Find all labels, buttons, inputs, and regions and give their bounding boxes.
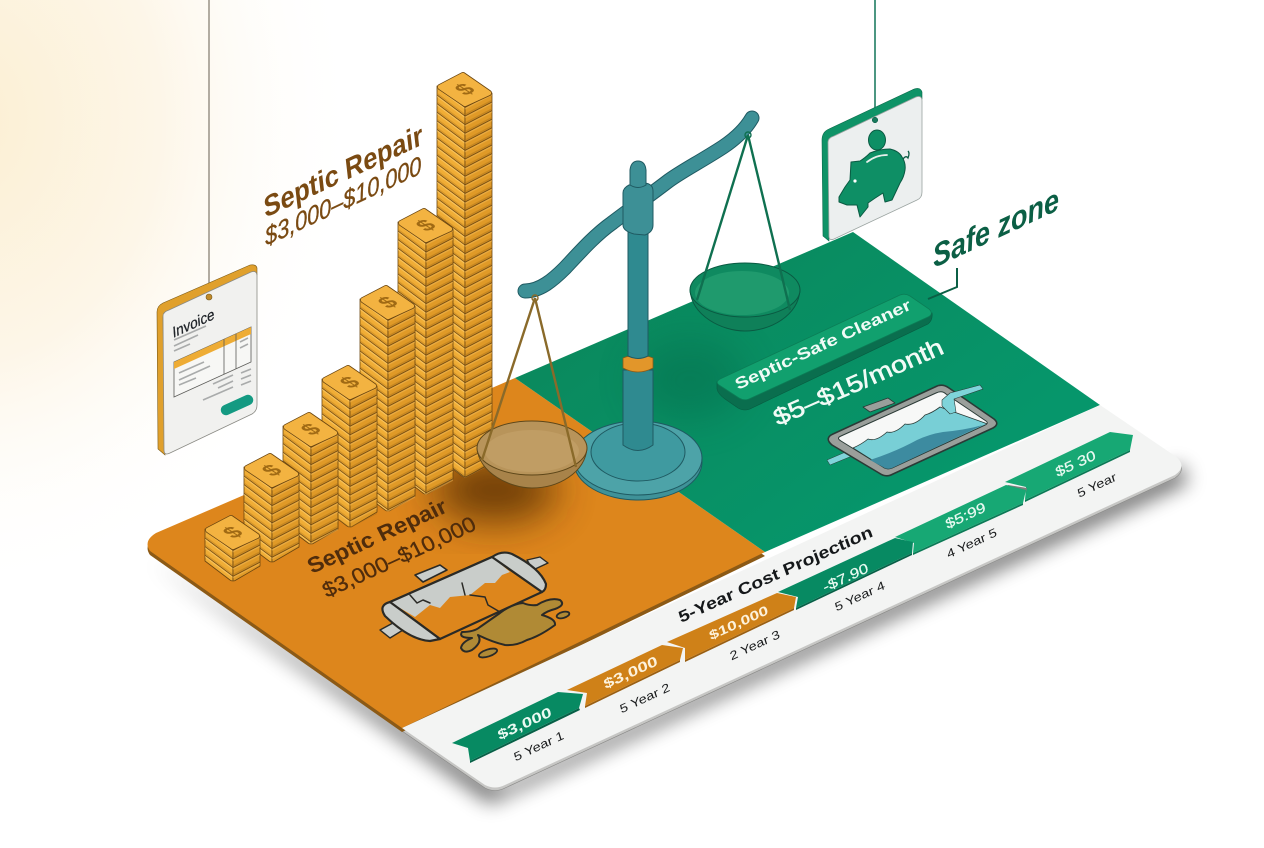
coin stack 1: $ — [217, 522, 249, 542]
ribbon 3 — [667, 593, 796, 662]
coin stack 2 — [244, 456, 299, 563]
badge side — [717, 313, 932, 410]
coin stack 4 — [322, 368, 377, 528]
ribbon 2 — [567, 645, 683, 708]
timeline heading: 5-Year Cost Projection — [676, 523, 875, 626]
year labels — [512, 470, 1118, 764]
ribbon 4 — [778, 538, 913, 610]
isometric base slab — [148, 232, 1181, 790]
cost projection timeline — [452, 432, 1133, 764]
piggy card edge — [822, 88, 922, 241]
slab orange edge — [148, 382, 765, 732]
scale shadow on orange — [433, 458, 557, 522]
tank deep water — [870, 425, 983, 469]
year labels: 5 Year 1 — [512, 728, 565, 764]
invoice table — [174, 327, 251, 397]
septic-safe cleaner badge — [717, 294, 932, 410]
coin stacks bar chart — [205, 75, 492, 582]
piggy bank card — [822, 88, 922, 241]
icon: broken tank — [380, 553, 570, 659]
invoice button — [226, 400, 248, 410]
label: septic repair on orange: $3,000–$10,000 — [318, 512, 480, 602]
piggy card face — [828, 96, 922, 240]
coin stack 3: $ — [295, 419, 327, 439]
year labels: 5 Year 2 — [618, 680, 671, 716]
heading: septic repair wall label: Septic Repair — [262, 117, 424, 224]
coin stack 7 — [437, 75, 492, 478]
piggy card hole — [872, 117, 878, 123]
invoice totals — [203, 369, 251, 400]
invoice card — [157, 265, 257, 455]
scale left pan — [477, 295, 587, 488]
tank crack — [410, 583, 500, 612]
coin stack 7: $ — [449, 79, 481, 99]
scale post upper — [628, 215, 648, 358]
leak puddle — [461, 599, 562, 652]
ribbon 5: $5:99 — [944, 500, 988, 532]
slab shadow — [150, 465, 1188, 803]
badge text: Septic-Safe Cleaner — [732, 295, 914, 393]
year labels: 5 Year — [1076, 470, 1118, 500]
ribbon 6 — [1005, 432, 1133, 502]
coin stack 6: $ — [410, 215, 442, 235]
year labels: 2 Year 3 — [728, 627, 781, 663]
scale shadow on green — [652, 344, 736, 418]
label: septic repair on orange: Septic Repair — [303, 493, 451, 578]
icon: clean septic tank — [827, 385, 997, 476]
tank left cap — [382, 602, 440, 641]
invoice title: Invoice — [172, 306, 215, 342]
ribbon 1 — [452, 692, 583, 763]
year labels: 5 Year 4 — [833, 578, 887, 614]
tank outer frame — [828, 385, 997, 476]
heading: septic repair wall label: $3,000–$10,000 — [263, 152, 423, 253]
price per month: $5–$15/month — [769, 333, 948, 431]
coin stack 3 — [283, 415, 338, 545]
scale — [477, 118, 800, 500]
scale orange collar — [623, 355, 653, 372]
coin stack 5: $ — [372, 292, 404, 312]
ribbon 3: $10,000 — [708, 603, 770, 644]
badge top — [717, 294, 931, 400]
tank body — [390, 557, 542, 639]
invoice hole — [206, 294, 212, 300]
tank intact shell — [390, 557, 510, 617]
scale right pan — [690, 132, 800, 331]
invoice text lines — [174, 326, 206, 351]
tank right cap — [492, 553, 546, 592]
tank pipes — [380, 557, 548, 638]
ribbon 6: $5 30 — [1054, 448, 1098, 480]
hanging line: piggy card — [874, 0, 876, 118]
tank interior — [838, 392, 987, 469]
panel: safe zone green — [515, 232, 1100, 552]
hanging line: invoice — [208, 0, 210, 295]
year labels: 4 Year 5 — [945, 525, 998, 561]
tank inlet pipe — [942, 385, 983, 414]
leak drops — [478, 610, 570, 659]
icon: falling coin — [868, 130, 886, 150]
tank outline top — [390, 557, 492, 602]
ribbon 2: $3,000 — [602, 653, 660, 692]
icon: piggy bank — [839, 149, 909, 217]
scale finial — [630, 161, 646, 188]
ribbon 5 — [895, 485, 1027, 555]
scale post lower — [623, 370, 653, 450]
tank water — [853, 407, 986, 469]
coin stack 4: $ — [334, 372, 366, 392]
scale base disc — [574, 421, 702, 500]
scale hub — [623, 183, 653, 235]
ribbon 1: $3,000 — [496, 704, 554, 743]
scale beam — [525, 118, 752, 291]
tank lid — [863, 398, 895, 412]
invoice card edge — [157, 265, 257, 455]
coin stack 1 — [205, 518, 260, 582]
tank outlet pipes — [827, 451, 852, 465]
safe zone leader line — [928, 268, 957, 299]
safe zone label: Safe zone — [931, 181, 1061, 275]
coin stack 6 — [398, 211, 453, 495]
panel: cost projection strip — [402, 405, 1182, 788]
panel: repair zone orange — [148, 378, 765, 728]
slab strip edge — [402, 408, 1182, 790]
ribbon 4: -$7.90 — [821, 561, 871, 596]
tank lid — [415, 565, 447, 582]
coin stack 2: $ — [256, 460, 288, 480]
coin stack 5 — [360, 288, 415, 512]
invoice card face — [163, 272, 257, 454]
